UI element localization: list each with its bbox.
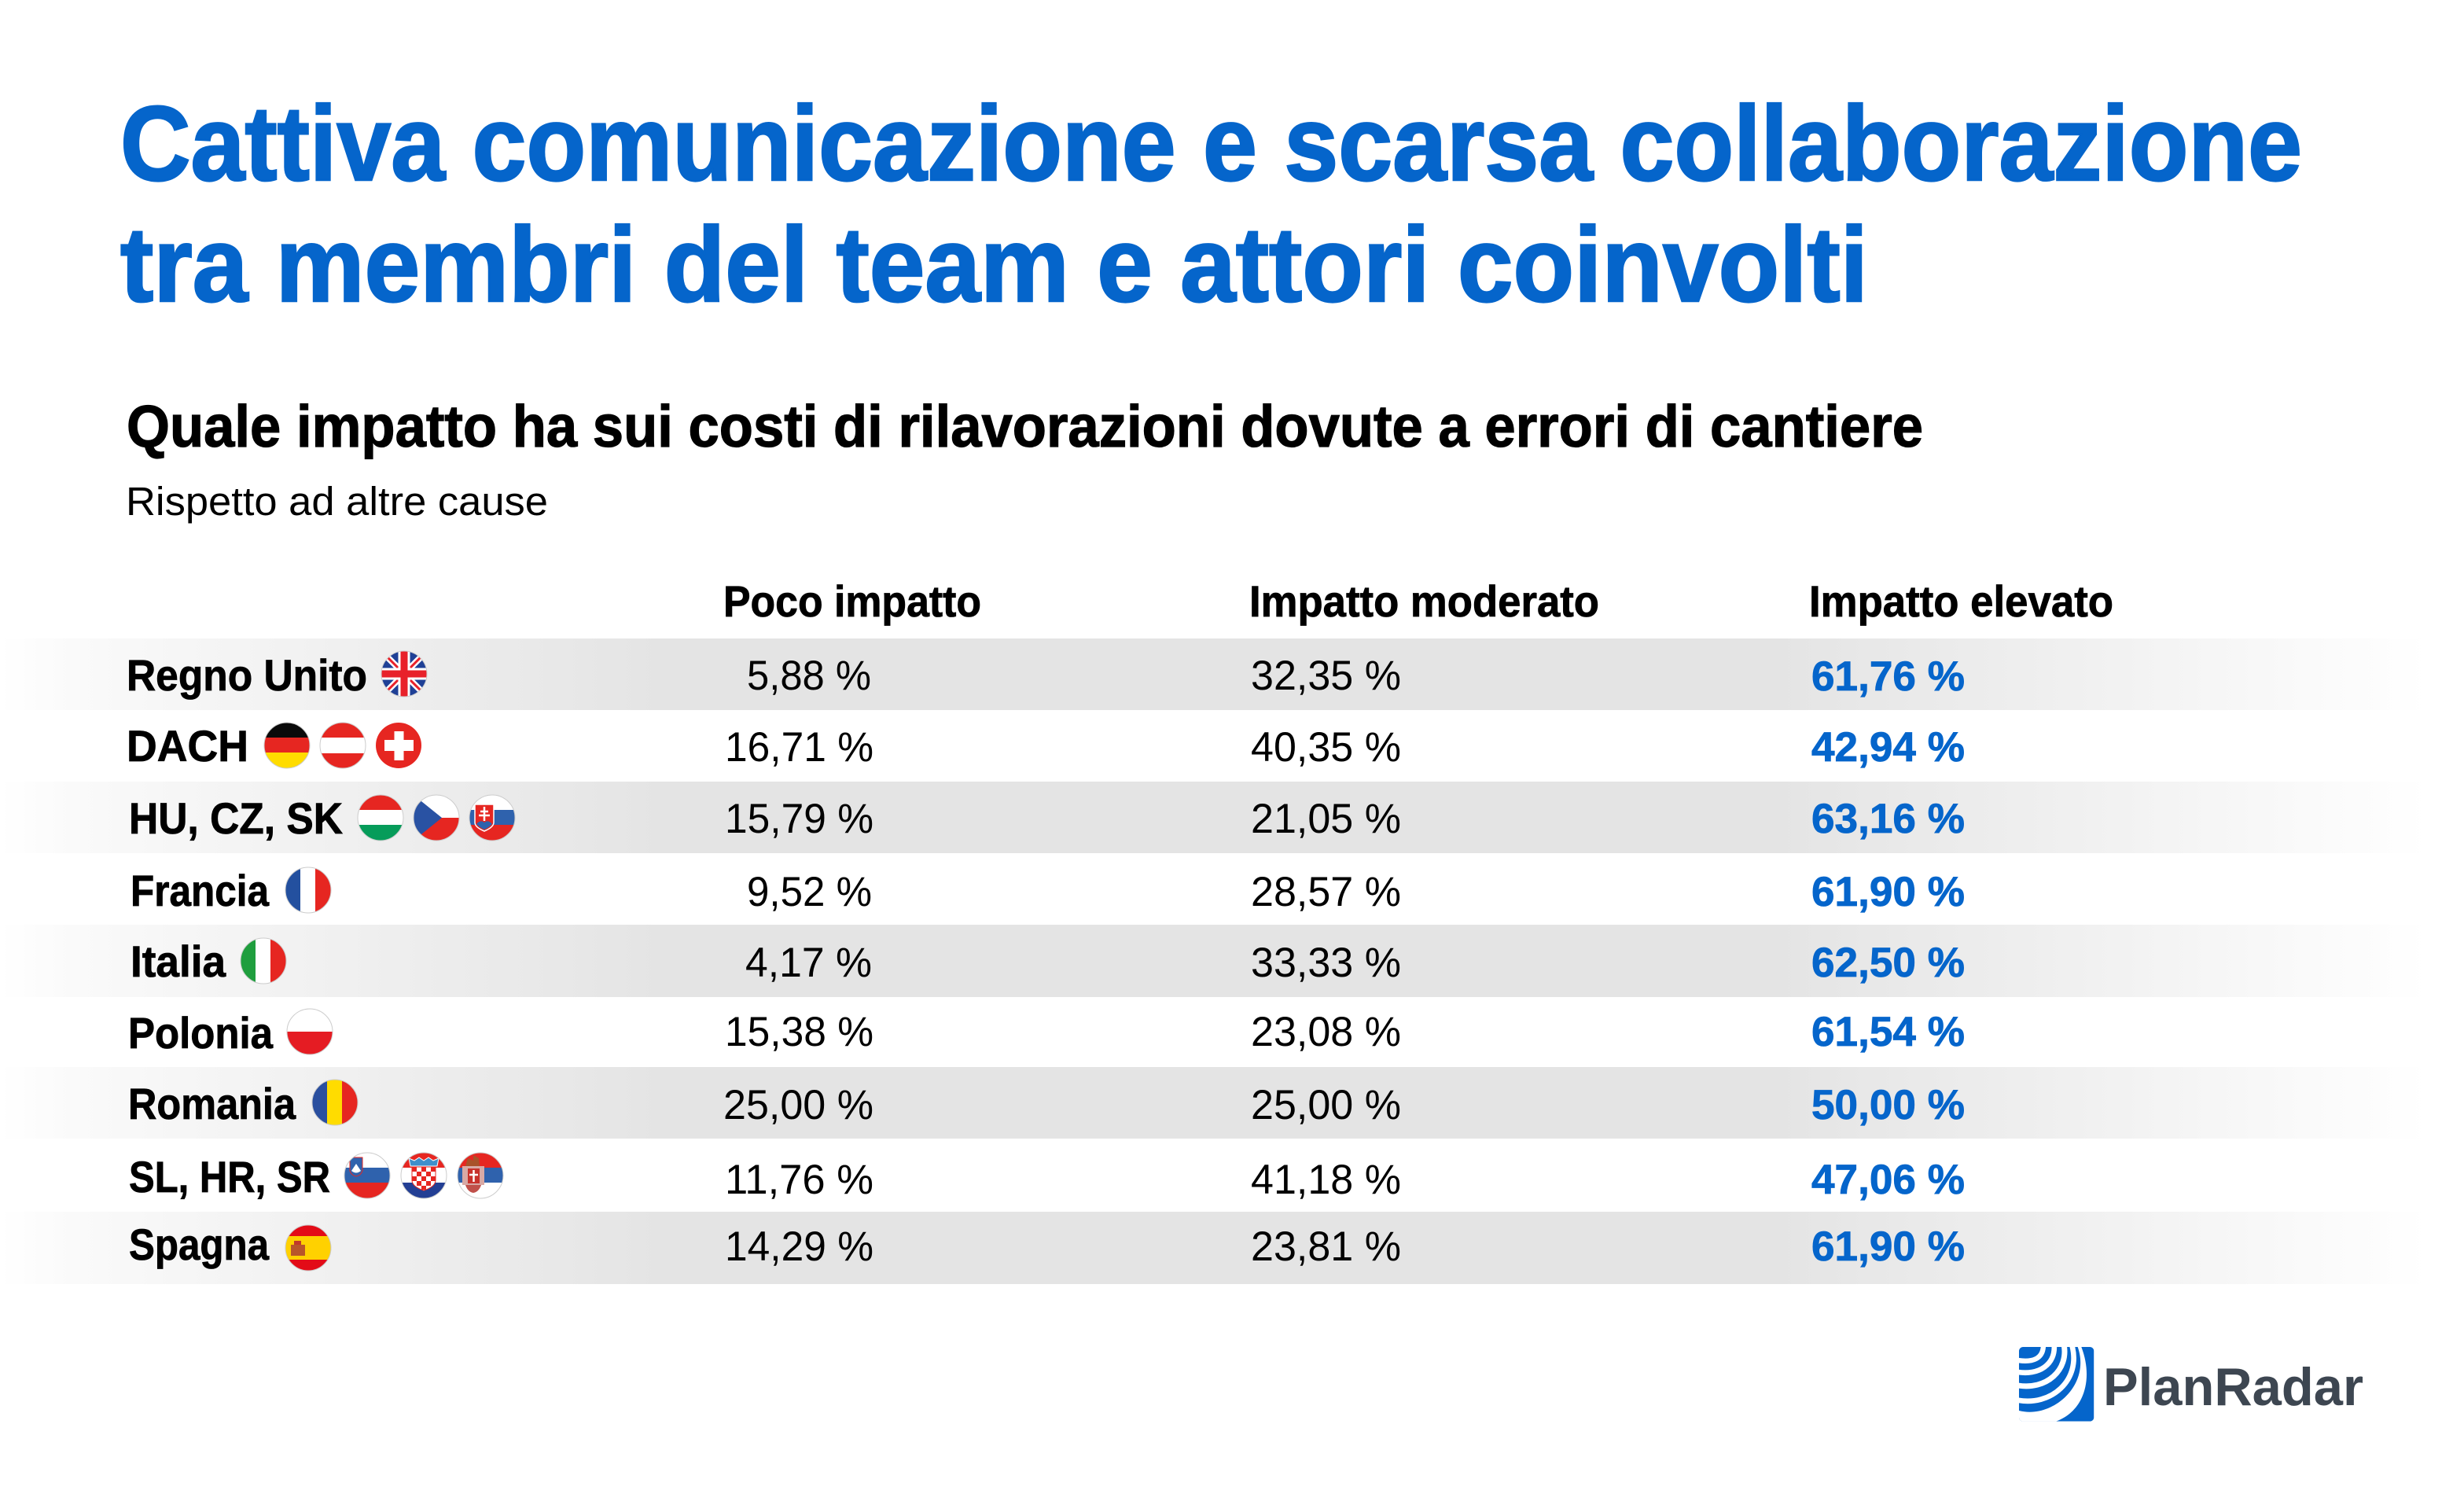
row: SL, HR, SR: 11,76 % xyxy=(725,1157,873,1203)
row: Polonia: 61,54 % xyxy=(1811,1009,1965,1055)
icon: Hungary flag xyxy=(358,795,403,841)
title: tra membri del team e attori coinvolti xyxy=(120,205,1868,324)
row: SL, HR, SR: 47,06 % xyxy=(1811,1157,1965,1203)
row: Polonia: Polonia xyxy=(128,1008,274,1058)
icon: Poland flag xyxy=(287,1009,333,1054)
row: HU, CZ, SK: 63,16 % xyxy=(1811,796,1965,842)
row: Italia: 33,33 % xyxy=(1251,940,1401,986)
subtitle heading: Quale impatto ha sui costi di rilavorazioni dovute a errori di cantiere xyxy=(127,393,1923,459)
table header: Impatto elevato xyxy=(1809,576,2113,626)
row: Regno Unito: 61,76 % xyxy=(1811,653,1965,700)
row: Spagna: Spagna xyxy=(129,1220,270,1269)
icon: Germany flag xyxy=(264,723,310,768)
row: Romania xyxy=(128,1079,1965,1128)
icon: Croatia flag xyxy=(401,1153,447,1198)
PlanRadar logo xyxy=(2017,1345,2363,1422)
row: SL, HR, SR xyxy=(129,1152,1965,1203)
icon: Austria flag xyxy=(320,723,366,768)
wordmark: PlanRadar xyxy=(2103,1357,2363,1417)
row: HU, CZ, SK: HU, CZ, SK xyxy=(129,793,343,843)
row: HU, CZ, SK: 15,79 % xyxy=(725,796,873,842)
row: Regno Unito xyxy=(127,650,1965,700)
subtitle note: Rispetto ad altre cause xyxy=(126,479,548,524)
icon: Switzerland flag xyxy=(376,723,421,768)
title xyxy=(120,84,2302,324)
title: Cattiva comunicazione e scarsa collaborazione xyxy=(120,84,2302,203)
icon: Romania flag xyxy=(312,1080,358,1125)
row: HU, CZ, SK xyxy=(129,793,1965,843)
row: Polonia: 23,08 % xyxy=(1251,1009,1401,1055)
table rows xyxy=(129,638,2236,1284)
row: Spagna xyxy=(129,1220,1965,1271)
table header: Impatto moderato xyxy=(1249,576,1599,626)
icon: UK flag xyxy=(381,651,427,697)
icon: Serbia flag xyxy=(458,1153,503,1198)
icon: radar mark xyxy=(2017,1345,2094,1422)
row: Italia: 62,50 % xyxy=(1811,940,1965,986)
row: Spagna: 14,29 % xyxy=(725,1224,873,1270)
row: Regno Unito: 32,35 % xyxy=(1251,653,1401,699)
row: DACH: DACH xyxy=(127,721,248,771)
row: Regno Unito: 5,88 % xyxy=(747,653,871,699)
row: Romania: 50,00 % xyxy=(1811,1082,1965,1128)
row: SL, HR, SR: SL, HR, SR xyxy=(129,1152,330,1201)
row: Francia: 28,57 % xyxy=(1251,869,1401,915)
table header xyxy=(723,576,2113,626)
table header: Poco impatto xyxy=(723,576,981,626)
row: Regno Unito: Regno Unito xyxy=(127,650,367,700)
row: Romania: 25,00 % xyxy=(723,1082,873,1128)
row: DACH: 42,94 % xyxy=(1811,724,1965,771)
icon: Spain flag xyxy=(285,1225,331,1271)
icon: Slovenia flag xyxy=(344,1153,390,1198)
row: Francia: 9,52 % xyxy=(747,869,872,915)
row: Francia: Francia xyxy=(131,866,270,915)
row: SL, HR, SR: 41,18 % xyxy=(1251,1157,1401,1203)
icon: Slovakia flag xyxy=(469,795,515,841)
row: DACH: 40,35 % xyxy=(1251,724,1401,771)
row: Italia: 4,17 % xyxy=(745,940,872,986)
row: Francia xyxy=(131,866,1965,915)
row: Italia xyxy=(131,937,1965,986)
row: DACH: 16,71 % xyxy=(725,724,873,771)
icon: France flag xyxy=(285,867,331,913)
row: Spagna: 23,81 % xyxy=(1251,1224,1401,1270)
row: Italia: Italia xyxy=(131,937,226,986)
icon: Czech flag xyxy=(414,795,459,841)
row: Francia: 61,90 % xyxy=(1811,869,1965,915)
row: Polonia: 15,38 % xyxy=(725,1009,873,1055)
row: HU, CZ, SK: 21,05 % xyxy=(1251,796,1401,842)
row: Romania: Romania xyxy=(128,1079,296,1128)
icon: Italy flag xyxy=(241,938,286,984)
row: Romania: 25,00 % xyxy=(1251,1082,1401,1128)
row: DACH xyxy=(127,721,1965,771)
row: Polonia xyxy=(128,1008,1965,1058)
row: Spagna: 61,90 % xyxy=(1811,1224,1965,1270)
